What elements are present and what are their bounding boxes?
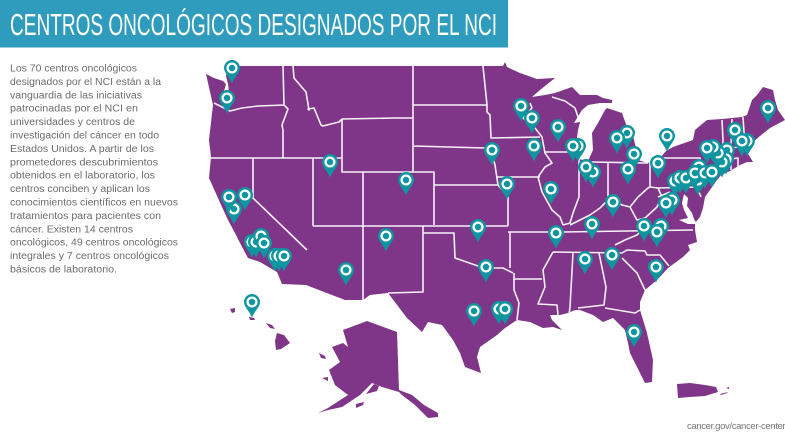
intro text block: prometedores descubrimientos bbox=[10, 157, 158, 168]
Alaska bbox=[318, 321, 438, 418]
intro text block: básicos de laboratorio. bbox=[10, 264, 117, 276]
intro text block: conocimientos científicos en nuevos bbox=[10, 198, 178, 208]
intro text block: Estados Unidos. A partir de los bbox=[10, 144, 154, 155]
Alaska islands bbox=[319, 353, 379, 408]
Chesapeake Bay bbox=[679, 194, 697, 224]
location pins: South bbox=[466, 192, 680, 348]
map of the United States bbox=[206, 62, 785, 418]
intro text block: Los 70 centros oncológicos bbox=[10, 64, 137, 74]
title banner bbox=[0, 0, 508, 48]
location pins: Midwest bbox=[484, 98, 675, 218]
intro text block: tratamientos para pacientes con bbox=[10, 211, 161, 222]
intro text block: investigación del cáncer en todo bbox=[10, 130, 159, 142]
intro text block: universidades y centros de bbox=[10, 117, 135, 128]
intro text block: patrocinadas por el NCI en bbox=[10, 104, 138, 115]
intro text block bbox=[10, 64, 178, 276]
intro text block: oncológicos, 49 centros oncológicos bbox=[10, 238, 178, 249]
location pins: Northeast bbox=[667, 100, 776, 196]
intro text block: obtenidos en el laboratorio, los bbox=[10, 171, 155, 182]
contiguous states bbox=[206, 62, 785, 383]
intro text block: integrales y 7 centros oncológicos bbox=[10, 251, 169, 262]
Puerto Rico bbox=[677, 383, 729, 398]
intro text block: vanguardia de las iniciativas bbox=[10, 90, 142, 101]
location pins: West bbox=[219, 60, 414, 318]
title banner: CENTROS ONCOLÓGICOS DESIGNADOS POR EL NCI bbox=[10, 7, 497, 42]
state borders bbox=[211, 66, 747, 320]
intro text block: centros conciben y aplican los bbox=[10, 184, 150, 195]
Hawaii bbox=[230, 308, 290, 350]
intro text block: cáncer. Existen 14 centros bbox=[10, 224, 133, 235]
intro text block: designados por el NCI están a la bbox=[10, 77, 161, 88]
